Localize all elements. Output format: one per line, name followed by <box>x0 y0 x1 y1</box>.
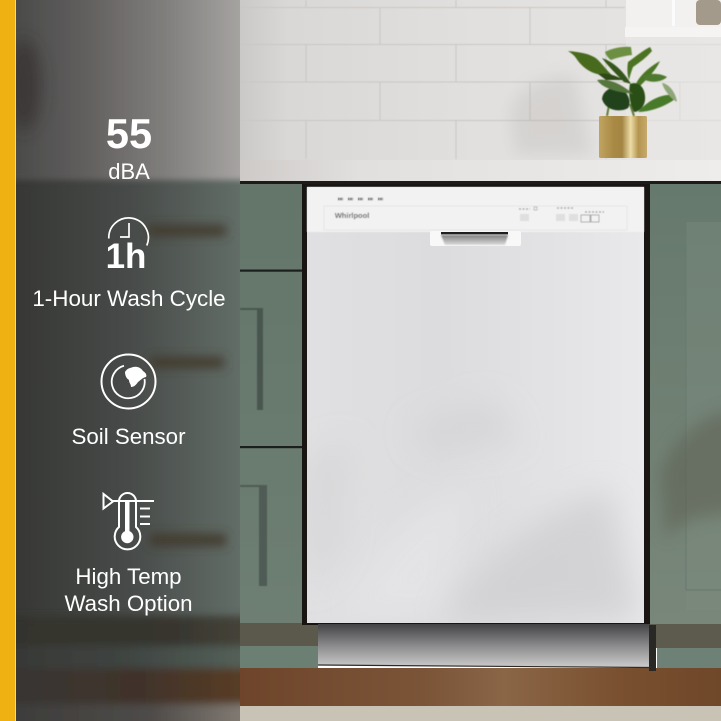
toe kick <box>318 624 651 667</box>
leaves <box>568 47 677 116</box>
yellow brand bar <box>0 0 16 721</box>
label: High Temp <box>75 564 182 589</box>
feature: soil sensor <box>71 354 186 449</box>
label: Soil Sensor <box>71 424 186 449</box>
brass pot <box>599 116 647 158</box>
feature: 1-hour wash cycle <box>32 218 226 311</box>
icon: clock with 1h: 1h <box>106 237 146 276</box>
label: 1-Hour Wash Cycle <box>32 286 226 311</box>
feature: high temp wash option <box>64 493 193 616</box>
feature: noise level <box>106 110 152 184</box>
right cabinet <box>650 184 721 672</box>
door handle <box>430 231 521 246</box>
wall: white brick backsplash <box>240 0 721 162</box>
left translucent panel <box>6 0 250 721</box>
wall shelf <box>625 0 721 160</box>
dark blurred shape top left <box>16 40 44 130</box>
left cabinets <box>240 184 320 674</box>
unit dBA: dBA <box>108 159 150 184</box>
label second line: Wash Option <box>64 591 193 616</box>
plant shadow on wall <box>510 74 592 155</box>
plant in brass pot <box>568 47 677 158</box>
floor <box>240 668 721 706</box>
icon: clock with 1h <box>106 218 148 276</box>
panel: upper wall area <box>6 0 250 180</box>
dishwasher <box>302 184 656 671</box>
brand logo: Whirlpool <box>335 211 369 220</box>
indicator labels <box>338 198 383 200</box>
control panel <box>307 187 644 232</box>
blurred handles behind panel <box>148 225 226 546</box>
icon: thermometer with spray <box>104 493 154 549</box>
icon: soil sensor <box>102 354 156 408</box>
value 55: 55 <box>106 110 152 157</box>
rug <box>240 706 721 721</box>
panel: lower floor area <box>6 616 250 721</box>
door <box>307 187 644 623</box>
countertop <box>240 160 721 184</box>
